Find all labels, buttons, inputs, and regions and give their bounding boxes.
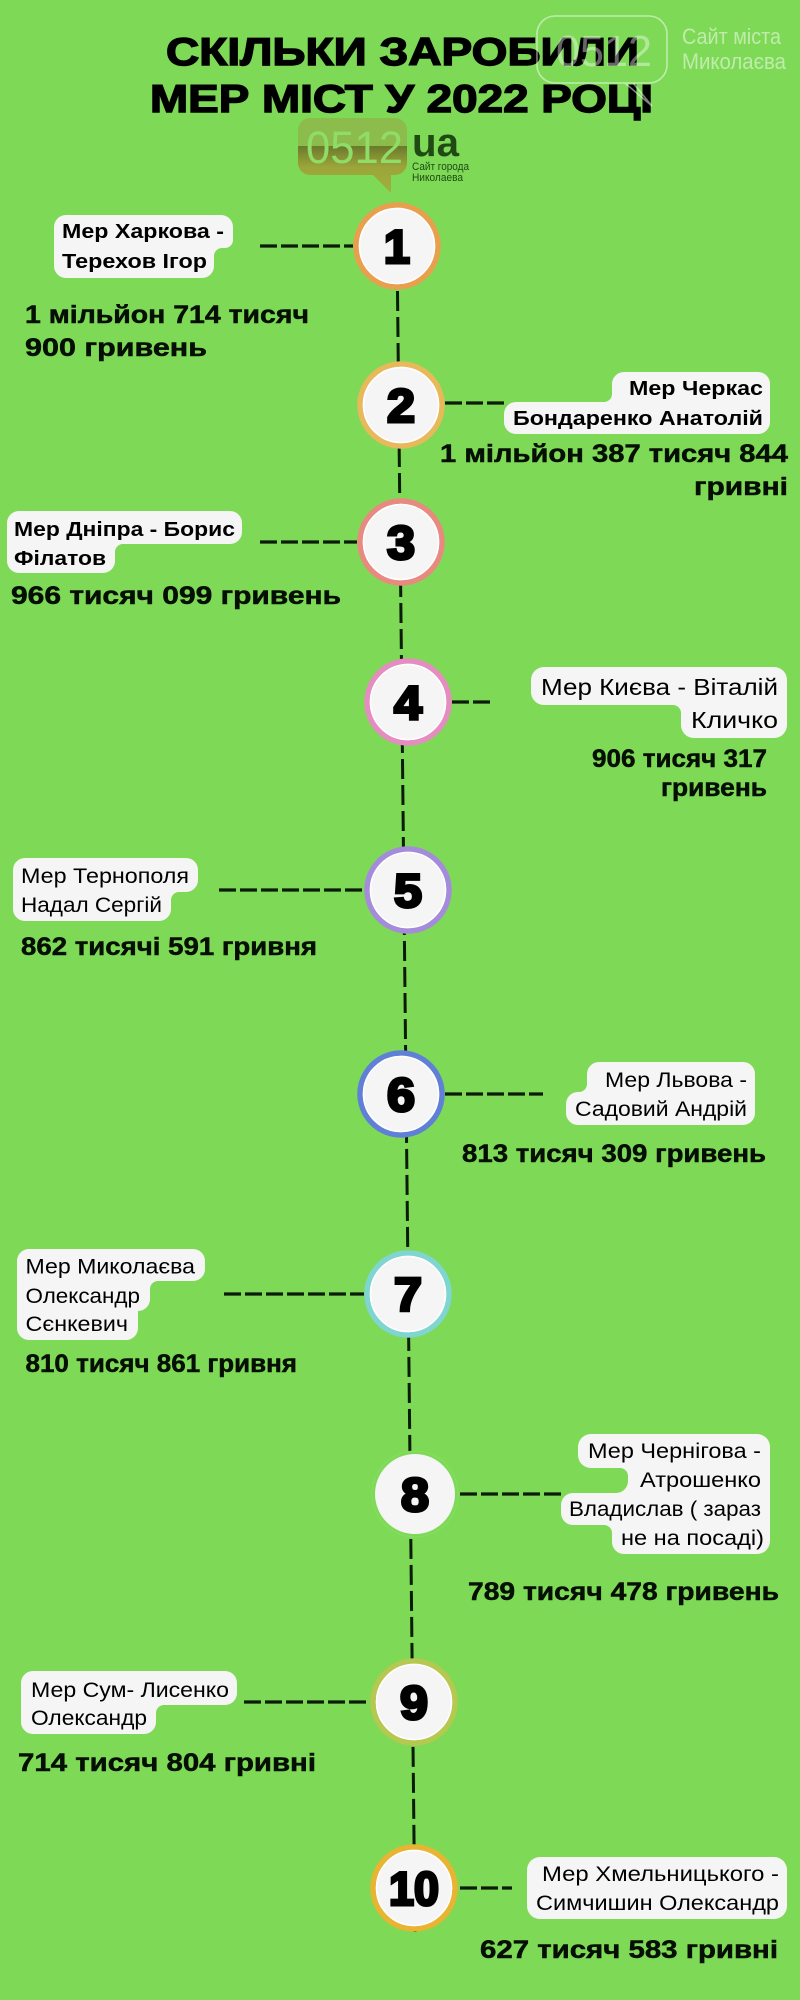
amount 1: 1 мільйон 714 тисяч bbox=[25, 301, 309, 329]
item 4 bbox=[367, 661, 787, 802]
connector 2 bbox=[445, 401, 506, 405]
logo: 0512.ua: ua bbox=[412, 121, 460, 165]
label 4: Кличко bbox=[691, 707, 778, 733]
label 3: Філатов bbox=[14, 548, 106, 570]
label 8 bbox=[561, 1434, 770, 1554]
logo: 0512.ua bbox=[298, 118, 470, 193]
label 1: Терехов Ігор bbox=[62, 251, 207, 273]
label 5: Мер Тернополя bbox=[21, 865, 189, 888]
label 4: Мер Києва - Віталій bbox=[541, 674, 778, 700]
item 10 bbox=[373, 1847, 787, 1964]
amount 4: гривень bbox=[661, 774, 767, 802]
label 2 bbox=[504, 372, 770, 434]
label 1 bbox=[54, 215, 233, 278]
amount 2 bbox=[440, 440, 788, 501]
label 1: Мер Харкова - bbox=[62, 221, 224, 243]
item 8 bbox=[372, 1434, 779, 1606]
node 7: 7 bbox=[394, 1268, 422, 1321]
watermark: site logo top right: Миколаєва bbox=[682, 49, 787, 74]
label 5: Надал Сергій bbox=[21, 894, 162, 917]
node 5: 5 bbox=[394, 864, 422, 917]
watermark: site logo top right: 0512 bbox=[556, 27, 652, 76]
amount 7: 810 тисяч 861 гривня bbox=[26, 1350, 297, 1378]
amount 9: 714 тисяч 804 гривні bbox=[18, 1749, 316, 1777]
logo: 0512.ua: Сайт города bbox=[412, 161, 470, 173]
node 8: 8 bbox=[401, 1468, 429, 1521]
label 5 bbox=[13, 858, 198, 921]
connector 9 bbox=[244, 1700, 367, 1704]
label 2: Мер Черкас bbox=[629, 378, 763, 400]
title bbox=[150, 31, 653, 121]
watermark: site logo top right: Сайт міста bbox=[682, 24, 782, 49]
node 4 bbox=[367, 661, 449, 743]
label 7: Олександр bbox=[26, 1285, 140, 1308]
watermark: site logo top right bbox=[537, 16, 787, 106]
label 9 bbox=[21, 1671, 237, 1734]
amount 10: 627 тисяч 583 гривні bbox=[480, 1936, 778, 1964]
label 3: Мер Дніпра - Борис bbox=[14, 519, 235, 541]
label 8: Атрошенко bbox=[640, 1469, 761, 1492]
node 10 bbox=[373, 1847, 455, 1929]
node 3: 3 bbox=[387, 516, 415, 569]
node 6 bbox=[360, 1053, 442, 1135]
item 2 bbox=[360, 364, 788, 501]
node 1: 1 bbox=[384, 220, 410, 273]
item 5 bbox=[13, 849, 449, 961]
timeline vertical dashed line bbox=[398, 291, 415, 1932]
item 1 bbox=[25, 205, 438, 362]
node 4: 4 bbox=[394, 676, 422, 729]
item 3 bbox=[7, 501, 442, 610]
connector 6 bbox=[445, 1092, 543, 1096]
connector 1 bbox=[260, 244, 353, 248]
label 7: Мер Миколаєва bbox=[26, 1256, 195, 1278]
node 2 bbox=[360, 364, 442, 446]
label 8: не на посаді) bbox=[621, 1527, 764, 1550]
label 8: Владислав ( зараз bbox=[569, 1498, 761, 1521]
node 5 bbox=[367, 849, 449, 931]
amount 2: гривні bbox=[694, 473, 788, 501]
amount 1: 900 гривень bbox=[25, 334, 207, 362]
node 2: 2 bbox=[387, 379, 415, 432]
connector 7 bbox=[224, 1292, 364, 1296]
label 2: Бондаренко Анатолій bbox=[513, 408, 763, 430]
label 6: Мер Львова - bbox=[605, 1069, 747, 1092]
label 10 bbox=[527, 1857, 787, 1919]
label 8: Мер Чернігова - bbox=[588, 1440, 761, 1463]
label 7: Сєнкевич bbox=[26, 1313, 128, 1336]
item 9 bbox=[18, 1661, 455, 1777]
amount 3: 966 тисяч 099 гривень bbox=[11, 582, 341, 610]
label 6: Садовий Андрій bbox=[575, 1098, 747, 1121]
node 9: 9 bbox=[400, 1676, 428, 1729]
label 6 bbox=[566, 1062, 755, 1125]
item 6 bbox=[360, 1053, 766, 1168]
logo: 0512.ua: Николаева bbox=[412, 172, 464, 184]
logo: 0512.ua: 0512 bbox=[306, 122, 403, 173]
node 3 bbox=[360, 501, 442, 583]
node 8 bbox=[372, 1451, 458, 1537]
label 4 bbox=[531, 667, 787, 738]
amount 4 bbox=[592, 745, 767, 802]
amount 2: 1 мільйон 387 тисяч 844 bbox=[440, 440, 788, 468]
label 10: Симчишин Олександр bbox=[536, 1892, 779, 1915]
title: МЕР МІСТ У 2022 РОЦІ bbox=[150, 78, 653, 121]
label 7 bbox=[17, 1249, 205, 1340]
item 7 bbox=[17, 1249, 449, 1378]
connector 4 bbox=[452, 700, 492, 704]
connector 3 bbox=[260, 540, 357, 544]
label 3 bbox=[7, 511, 242, 573]
label 10: Мер Хмельницького - bbox=[542, 1863, 779, 1886]
node 10: 10 bbox=[389, 1862, 439, 1915]
label 9: Олександр bbox=[31, 1707, 147, 1730]
node 1 bbox=[356, 205, 438, 287]
amount 6: 813 тисяч 309 гривень bbox=[462, 1140, 766, 1168]
label 9: Мер Сум- Лисенко bbox=[31, 1679, 229, 1702]
amount 5: 862 тисячі 591 гривня bbox=[21, 933, 317, 961]
connector 5 bbox=[219, 888, 364, 892]
connector 10 bbox=[460, 1886, 512, 1890]
amount 8: 789 тисяч 478 гривень bbox=[468, 1578, 779, 1606]
node 7 bbox=[367, 1253, 449, 1335]
title: СКІЛЬКИ ЗАРОБИЛИ bbox=[166, 31, 639, 74]
node 9 bbox=[373, 1661, 455, 1743]
amount 4: 906 тисяч 317 bbox=[592, 745, 767, 773]
connector 8 bbox=[460, 1492, 561, 1496]
node 6: 6 bbox=[387, 1068, 415, 1121]
amount 1 bbox=[25, 301, 309, 362]
